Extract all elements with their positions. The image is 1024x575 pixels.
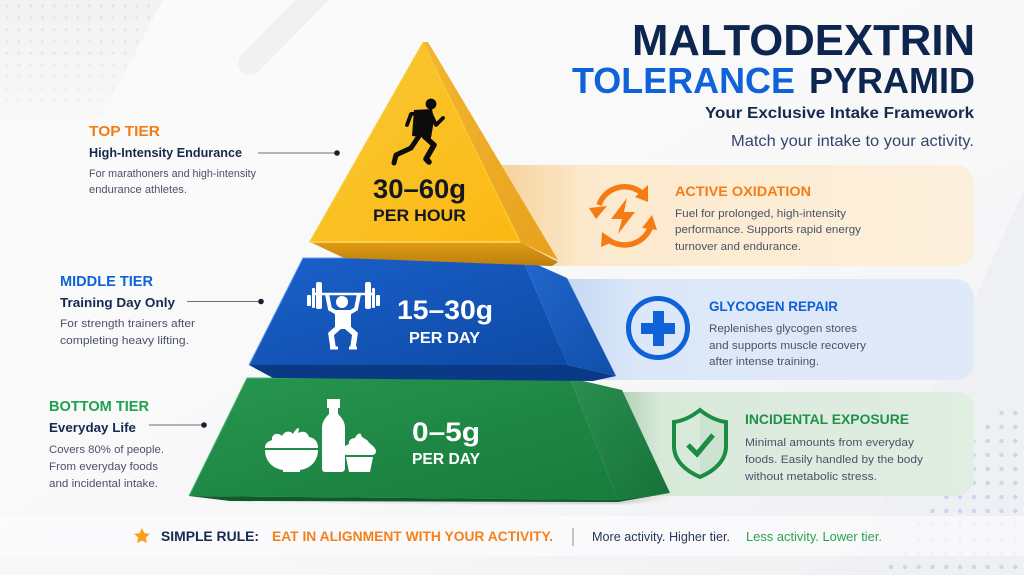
pyramid tier: yellow top — [310, 42, 558, 266]
value: 0-5g per day — [412, 417, 480, 468]
text: incidental exposure description: foods. Easily handled by the body — [745, 454, 924, 466]
label: bottom tier: BOTTOM TIER — [49, 398, 149, 415]
label: top tier: High-Intensity Endurance — [89, 145, 242, 160]
text: glycogen repair description — [709, 323, 867, 368]
label: middle tier: For strength trainers after — [60, 318, 195, 330]
rule statement: EAT IN ALIGNMENT WITH YOUR ACTIVITY. — [272, 529, 553, 544]
text: active oxidation description: turnover and endurance. — [675, 241, 801, 253]
label: middle tier: MIDDLE TIER — [60, 273, 153, 290]
text: incidental exposure description: Minimal amounts from everyday — [745, 437, 915, 449]
label: top tier — [89, 123, 256, 196]
panel background: green — [610, 392, 974, 496]
text: active oxidation description: performance. Supports rapid energy — [675, 224, 862, 236]
panel background: blue — [560, 279, 974, 380]
connector: middle tier — [187, 299, 264, 304]
icon: medical plus — [628, 298, 688, 358]
text: glycogen repair description: Replenishes glycogen stores — [709, 323, 858, 335]
text: incidental exposure description: without metabolic stress. — [744, 471, 877, 483]
value: 30-60g per hour: 30–60g — [373, 174, 466, 204]
value: 0-5g per day: PER DAY — [412, 451, 480, 468]
icon: food, bottle and cupcake — [265, 399, 376, 472]
text: incidental exposure description — [744, 437, 924, 483]
icon: energy cycle — [589, 185, 657, 247]
text: glycogen repair description: after intense training. — [709, 356, 819, 368]
pyramid tier: green bottom — [189, 378, 672, 503]
label: middle tier: Training Day Only — [60, 295, 176, 310]
text: active oxidation description — [675, 208, 862, 253]
value: 0-5g per day: 0–5g — [412, 417, 480, 447]
heading: active oxidation: ACTIVE OXIDATION — [675, 183, 811, 199]
subtitle: Your Exclusive Intake Framework — [705, 105, 974, 122]
note: less activity: Less activity. Lower tier. — [746, 530, 882, 544]
label: bottom tier: From everyday foods — [49, 461, 159, 473]
tagline: Match your intake to your activity. — [731, 133, 974, 150]
footer: simple rule — [0, 516, 1024, 556]
heading: incidental exposure: INCIDENTAL EXPOSURE — [745, 411, 909, 427]
icon: star — [134, 528, 150, 543]
connector: bottom tier — [149, 422, 207, 428]
value: 15-30g per day: PER DAY — [409, 330, 480, 347]
title: TOLERANCE — [572, 60, 795, 101]
icon: weightlifter — [307, 282, 380, 348]
title: PYRAMID — [809, 60, 975, 101]
pyramid tier: blue middle — [249, 258, 616, 381]
value: 15-30g per day — [397, 295, 493, 347]
value: 30-60g per hour — [373, 174, 466, 225]
icon: runner — [394, 99, 443, 163]
value: 15-30g per day: 15–30g — [397, 295, 493, 325]
panel background: orange — [490, 165, 974, 266]
heading: glycogen repair: GLYCOGEN REPAIR — [709, 298, 838, 314]
text: active oxidation description: Fuel for prolonged, high-intensity — [675, 208, 847, 220]
label: bottom tier: and incidental intake. — [49, 478, 158, 490]
label: bottom tier — [49, 398, 164, 490]
label: bottom tier: Covers 80% of people. — [49, 444, 164, 456]
label: bottom tier: Everyday Life — [49, 420, 136, 435]
label: top tier: endurance athletes. — [89, 184, 187, 196]
rule label: SIMPLE RULE: — [161, 529, 259, 544]
pyramid — [189, 42, 672, 503]
panel: active oxidation — [490, 165, 974, 266]
title — [572, 16, 975, 101]
icon: shield check — [674, 410, 726, 477]
label: middle tier — [60, 273, 195, 347]
connector: top tier — [258, 150, 340, 156]
panel: incidental exposure — [610, 392, 974, 496]
panel: glycogen repair — [560, 279, 974, 380]
note: more activity: More activity. Higher tier. — [592, 530, 730, 544]
label: top tier: TOP TIER — [89, 123, 160, 140]
label: middle tier: completing heavy lifting. — [60, 335, 189, 347]
label: top tier: For marathoners and high-intensity — [89, 168, 256, 180]
text: glycogen repair description: and supports muscle recovery — [709, 340, 867, 352]
value: 30-60g per hour: PER HOUR — [373, 206, 466, 225]
title: MALTODEXTRIN — [632, 16, 975, 65]
